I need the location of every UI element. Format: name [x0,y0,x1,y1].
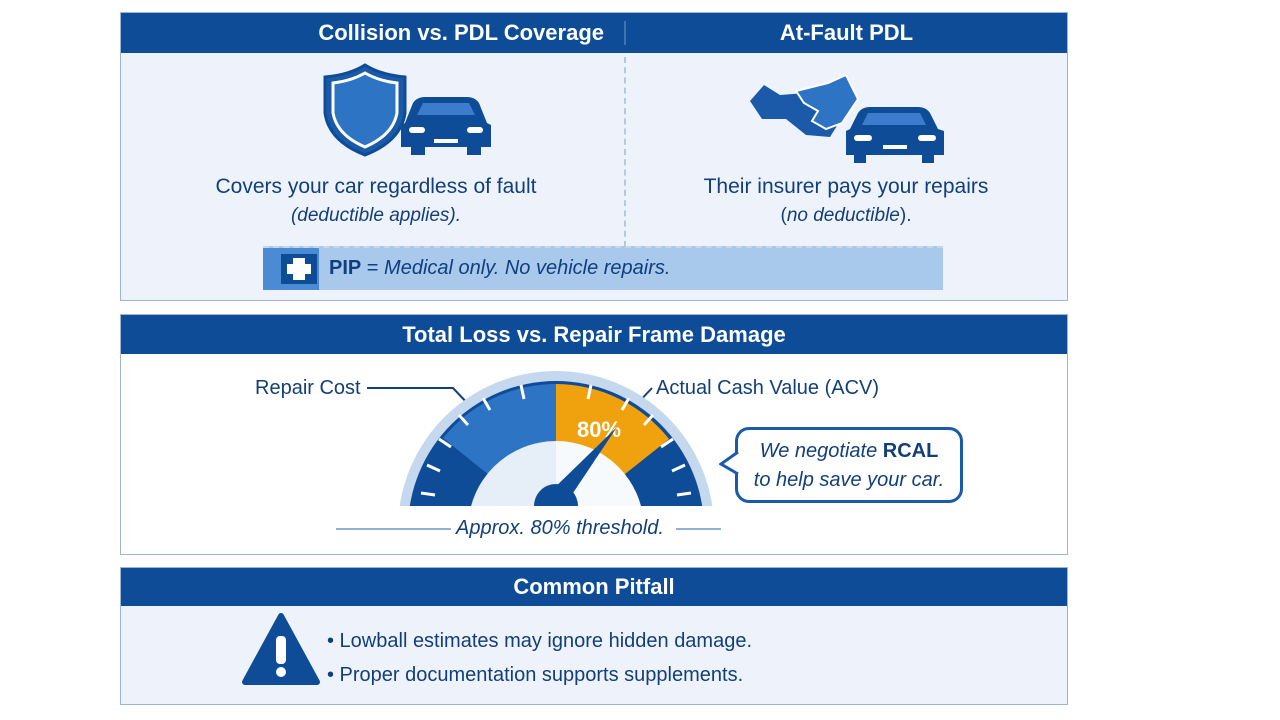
text: collision [216,175,536,226]
chart: gauge: 80% [577,417,621,442]
text: bullets: • Lowball estimates may ignore hidden damage. [327,630,752,652]
header: coverage [121,13,1067,53]
label: repair cost: Repair Cost [255,377,361,399]
text: threshold: Approx. 80% threshold. [456,517,664,539]
text: collision: Covers your car regardless of fault [216,175,536,198]
panel: coverage [120,12,1068,301]
icon: handshake and car [750,74,944,163]
text: pdl [704,175,988,226]
callout: PIP: PIP = Medical only. No vehicle repairs. [329,257,670,279]
callout: RCAL: We negotiate RCAL [760,440,938,462]
icon: medical cross [281,254,317,284]
header: total loss [121,315,1067,354]
text: bullets [327,630,752,686]
icon: warning [242,613,320,685]
callout: RCAL [735,427,963,503]
text: collision: (deductible applies). [291,205,461,226]
header: coverage: At-Fault PDL [780,20,913,45]
header: pitfall: Common Pitfall [513,574,675,599]
callout: RCAL: to help save your car. [754,469,944,491]
chart: gauge [336,371,721,530]
text: pdl: (no deductible). [780,205,911,226]
header: pitfall [121,568,1067,606]
icon: shield and car [324,63,491,157]
header: coverage: Collision vs. PDL Coverage [318,20,604,45]
text: pdl: Their insurer pays your repairs [704,175,988,198]
panel: total loss [120,314,1068,555]
text: bullets: • Proper documentation supports supplements. [327,664,743,686]
callout: PIP [263,246,943,290]
header: total loss: Total Loss vs. Repair Frame Damage [402,322,786,346]
label: ACV: Actual Cash Value (ACV) [656,377,879,399]
panel: pitfall [120,567,1068,705]
